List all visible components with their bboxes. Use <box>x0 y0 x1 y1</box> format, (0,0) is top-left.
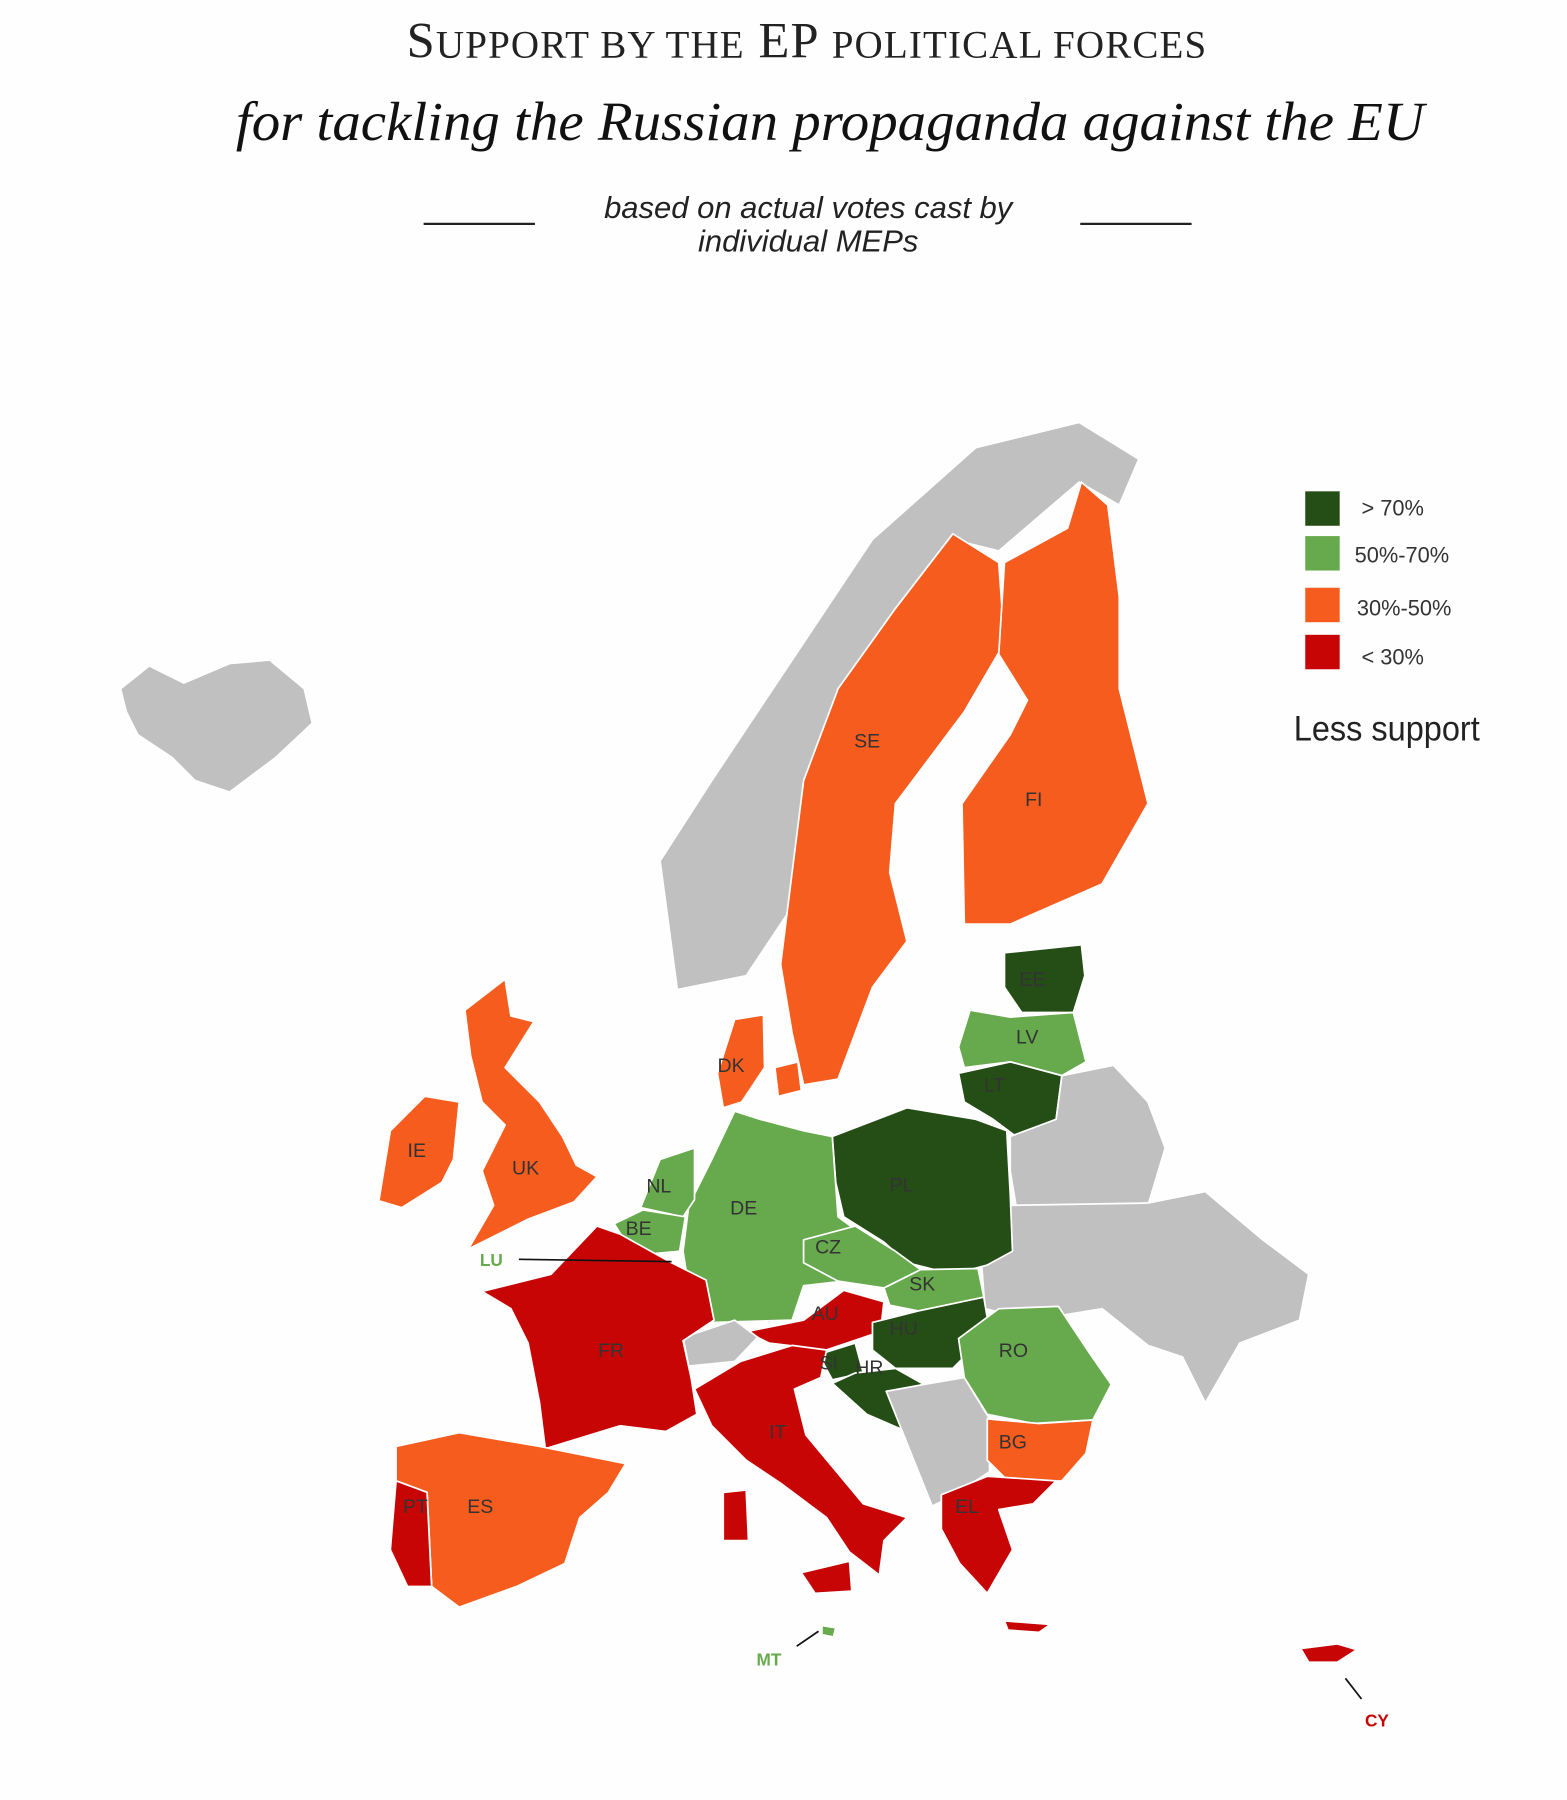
note: based on actual votes: based on actual votes cast by <box>604 190 1015 225</box>
Croatia <box>832 1368 924 1433</box>
country labels: DE <box>730 1198 757 1220</box>
callout: MT <box>757 1631 819 1670</box>
country labels: CZ <box>815 1237 841 1259</box>
country labels: PL <box>890 1175 914 1197</box>
legend: 50%-70% <box>1355 542 1449 567</box>
country labels: IE <box>408 1140 426 1162</box>
Balkans <box>886 1378 990 1506</box>
Malta <box>822 1626 836 1637</box>
Norway <box>660 422 1139 990</box>
callout: LU: LU <box>480 1250 503 1270</box>
country labels: ES <box>467 1496 493 1518</box>
Latvia <box>959 1010 1086 1076</box>
Finland <box>962 482 1148 924</box>
country labels: SI <box>820 1353 838 1375</box>
country labels: FI <box>1025 789 1042 811</box>
legend note: less support: Less support <box>1294 708 1480 748</box>
Ukraine/Russia <box>982 1192 1309 1403</box>
title: SUPPORT BY THE EP POLITICAL FORCES <box>407 12 1207 68</box>
legend: > 70% <box>1361 495 1424 520</box>
map of Europe <box>121 422 1357 1662</box>
country labels: EE <box>1019 969 1045 991</box>
Switzerland <box>683 1320 758 1366</box>
Germany <box>683 1111 872 1322</box>
country labels: LT <box>984 1075 1005 1097</box>
Slovakia <box>884 1268 984 1311</box>
Ireland <box>379 1096 459 1208</box>
legend <box>1305 491 1451 670</box>
Spain <box>396 1433 626 1607</box>
country labels: UK <box>512 1157 539 1179</box>
Cyprus <box>1301 1644 1357 1662</box>
country labels: EL <box>955 1496 979 1518</box>
callout: CY <box>1345 1678 1389 1731</box>
country labels: BE <box>626 1218 652 1240</box>
country labels: NL <box>646 1176 671 1198</box>
callout: MT: MT <box>757 1650 782 1670</box>
Belgium <box>614 1210 685 1254</box>
legend: 30%-50% <box>1357 595 1451 620</box>
country labels: AU <box>812 1303 839 1325</box>
Greece <box>941 1476 1056 1632</box>
country labels: IT <box>769 1421 787 1443</box>
subtitle script: for tackling the Russian propaganda against the EU <box>236 91 1427 152</box>
country labels: HR <box>855 1357 883 1379</box>
country labels: BG <box>999 1432 1027 1454</box>
legend: < 30% <box>1361 645 1424 670</box>
Lithuania <box>959 1062 1062 1136</box>
Bulgaria <box>987 1419 1093 1483</box>
Romania <box>959 1306 1111 1423</box>
note: based on actual votes: individual MEPs <box>698 223 918 258</box>
country labels: SK <box>909 1273 935 1295</box>
Slovenia <box>819 1343 863 1380</box>
country labels: FR <box>598 1340 624 1362</box>
country labels: DK <box>717 1055 745 1077</box>
France <box>482 1226 714 1449</box>
Denmark <box>717 1015 801 1108</box>
country labels: HU <box>890 1318 918 1340</box>
Iceland <box>121 660 312 792</box>
Belarus <box>1010 1065 1165 1208</box>
Netherlands <box>641 1148 695 1217</box>
Poland <box>832 1108 1013 1274</box>
Sweden <box>781 534 1004 1085</box>
Portugal <box>390 1481 432 1586</box>
note: based on actual votes <box>424 190 1192 258</box>
Estonia <box>1004 945 1085 1012</box>
country labels: RO <box>999 1340 1028 1362</box>
United Kingdom <box>465 979 597 1249</box>
Austria <box>746 1290 884 1350</box>
Hungary <box>872 1297 990 1368</box>
country labels: LV <box>1016 1026 1038 1048</box>
callout: CY: CY <box>1365 1711 1389 1731</box>
Czechia <box>804 1226 921 1288</box>
Italy <box>695 1345 907 1593</box>
country labels: PT <box>403 1496 428 1518</box>
country labels <box>403 730 1045 1518</box>
country labels: SE <box>854 730 880 752</box>
